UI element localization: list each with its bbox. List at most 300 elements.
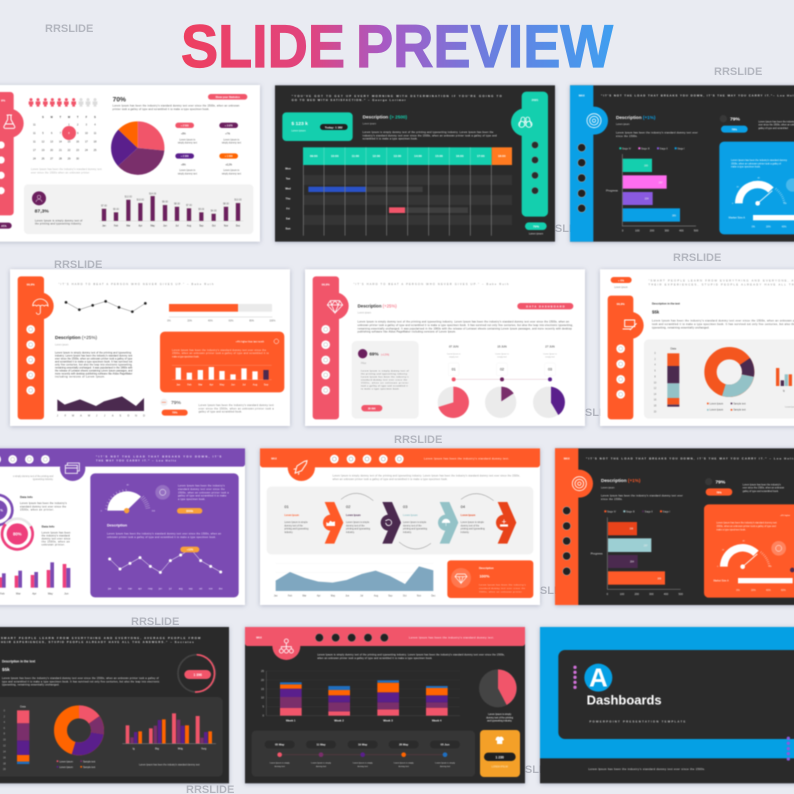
title: SLIDE: [181, 13, 345, 80]
timeline: 07 JUN: [449, 345, 458, 349]
area chart: Aug: [374, 594, 379, 597]
calendar: 4: [94, 124, 96, 127]
description: Lorem Ipsum has been the industry's standard dummy text ever since the 1500s, when an unknown printer took a galley of: [2, 677, 159, 680]
intro text: [317, 653, 505, 660]
intro text: when an unknown printer took a galley of type and scrambled it to make a type specimen book.: [333, 478, 448, 481]
panel: monthly bars: 87,3%: [35, 209, 49, 215]
calendar: F: [86, 116, 88, 119]
card: description 100%: [447, 560, 533, 598]
panel: orange gauge: +4% higher: [780, 514, 790, 517]
body text: Lorem Ipsum is simply dummy text of the printing and typesetting industry. Lorem Ipsum has been the industry's standard dummy text ever since the 1500s, when an: [358, 321, 570, 324]
description: Lorem ipsum: [601, 487, 615, 490]
progress bar: 80%: [249, 320, 254, 322]
calendar: 17: [85, 141, 88, 144]
panel: monthly bars: $10.00: [234, 200, 242, 202]
calendar: 3: [86, 124, 88, 127]
logo A: A: [589, 662, 608, 692]
card: KPI 1 230: 1 230: [495, 755, 504, 759]
area chart: Sep: [388, 595, 393, 597]
panel: orange gauge: [704, 504, 794, 598]
panel: timeline: 05 Jun: [441, 743, 450, 747]
panel: charts: Sample text: [83, 760, 96, 763]
calendar: 12: [42, 141, 45, 144]
calendar: 21: [59, 149, 62, 152]
calendar: 6: [51, 132, 53, 135]
data info 1: 1500s, when an printer.: [20, 509, 54, 512]
watermarks: RRSLIDE: [509, 764, 557, 776]
calendar: 23: [76, 149, 80, 152]
data info 1: Lorem Ipsum has been the industry's: [20, 502, 67, 505]
legend: Stage IV: [607, 510, 616, 513]
panel: purple charts: +12%: [187, 549, 194, 552]
panel: monthly bars: [24, 184, 253, 234]
ring chart 80%: [0, 513, 38, 555]
panel: purple charts: Description: [107, 523, 127, 527]
calendar: 14: [59, 141, 62, 144]
progress bar: 40%: [208, 320, 213, 322]
stacked bar chart: 20: [261, 678, 265, 682]
panel: charts: 16: [654, 400, 657, 402]
stat text: [758, 120, 794, 130]
calendar: T: [77, 116, 79, 119]
step texts: printing and typesetting: [403, 528, 428, 531]
panel: monthly bars: $9.00: [162, 202, 169, 204]
button: data dashboard: DATA DASHBOARD: [526, 304, 565, 308]
pie legend cards: Lorem Ipsum is: [179, 138, 196, 141]
legend: Stage IV: [622, 147, 631, 150]
panel: purple charts: 40: [127, 484, 130, 486]
pie legend cards: Lorem Ipsum is: [223, 169, 240, 172]
panel: orange gauge: make a type specimen book.: [716, 528, 746, 531]
panel: four-step process: [267, 487, 533, 554]
calendar: 1: [68, 124, 70, 127]
top bar: [260, 448, 540, 481]
pie charts: [438, 387, 565, 418]
panel: blue gauge: 40: [758, 177, 761, 179]
intro text: when an unknown printer took a galley of type and scrambled it to make a type specimen book.: [317, 657, 433, 660]
step texts: Lorem Ipsum: [284, 515, 299, 517]
icon: hearts column: [573, 666, 577, 689]
bar chart: progress: 400: [664, 592, 669, 596]
quote: [648, 278, 794, 286]
stacked bar chart: Week 4: [432, 719, 442, 723]
area chart: Feb: [288, 595, 293, 597]
bar chart: progress: 0: [607, 592, 609, 596]
stacked bar chart: [261, 669, 460, 723]
panel: monthly bars: $5.00: [113, 209, 120, 211]
calendar: 24: [33, 158, 36, 161]
bar chart: progress: 500: [694, 229, 699, 233]
panel: stat card: Lorem Ipsum has been the industry's: [361, 376, 408, 379]
KPI card: Lorem ipsum: [291, 129, 306, 132]
panel: purple charts: 1500s, when an unknown printer took a: [178, 491, 229, 494]
pie legend cards: Lorem Ipsum is: [223, 138, 240, 141]
schedule table: Wed: [285, 186, 291, 190]
panel: monthly bars: Oct: [212, 225, 216, 228]
description: industry's standard dummy text ever since the 1500s, when an unknown printer took a galley of type and: [363, 134, 497, 137]
panel: slide 8 process arrows: [260, 448, 540, 605]
bar chart: progress: 199: [629, 529, 634, 531]
ring chart 1: %: [0, 508, 3, 512]
panel: slide 2 dark schedule: [275, 85, 555, 242]
stat text: ever since the 1500s, when an unknown: [743, 487, 785, 490]
panel: charts: 4: [4, 722, 6, 724]
calendar: 2: [77, 124, 79, 127]
top bar: MAX: [271, 458, 277, 461]
panel: orange bars: 1500s, when an unknown printer took a galley of type and scrambled it to: [172, 352, 269, 355]
panel: purple charts: galley of type and scrambled it to make: [178, 495, 227, 498]
area chart: J: [104, 415, 106, 418]
pie legend cards: + 2 500: [181, 125, 189, 127]
panel: purple charts: [90, 473, 239, 597]
card: KPI 1 230: [480, 730, 520, 777]
line chart: [65, 300, 147, 313]
panel: stat card: to make a type specimen book.: [361, 388, 400, 391]
calendar: 16: [76, 141, 80, 144]
data info 1: Data Info: [20, 495, 33, 499]
panel: blue gauge: 20: [737, 187, 740, 189]
panel: orange bars: Lorem Ipsum has been the industry's standard dummy text ever since the: [172, 349, 267, 352]
panel: charts: Lorem Ipsum: [59, 760, 73, 763]
right sidebar: [511, 92, 548, 235]
stacked bar chart: 10: [261, 696, 265, 700]
panel: purple charts: Lorem Ipsum has been the industry's standard dummy text ever since the 1500s, when an: [107, 533, 222, 536]
panel: blue gauge: 0: [732, 203, 734, 205]
calendar: 22: [68, 149, 71, 152]
description: Lorem Ipsum is simply dummy text of the printing and typesetting: [55, 352, 132, 355]
area chart: Jul: [360, 595, 364, 597]
schedule table: Tue: [286, 176, 291, 180]
panel: stat card: 1500s, when an unknown printer: [361, 382, 409, 385]
bar chart: progress: 204: [630, 562, 635, 564]
stat 79%: [160, 399, 188, 416]
step texts: Lorem Ipsum is simple: [403, 521, 427, 524]
title: PREVIEW: [356, 13, 613, 80]
pie chart: dummy text of the printing: [486, 716, 514, 719]
panel: monthly bars: Jun: [163, 226, 168, 228]
watermarks: RRSLIDE: [524, 585, 572, 597]
panel: charts: 2: [654, 359, 656, 361]
pie legend cards: [175, 123, 241, 175]
area chart: [274, 563, 436, 597]
panel: charts: [644, 339, 794, 419]
quote: "IT'S NOT THE LOAD THAT BREAKS YOU DOWN, IT'S THE WAY YOU CARRY IT." – Lou Holtz: [586, 457, 794, 461]
panel: charts: Sample text: [733, 402, 746, 405]
description: the release of Letraset sheets containing Lorem Ipsum passages, and: [55, 370, 133, 373]
stacked bar chart: Week 1: [286, 719, 296, 723]
description: since the 1500s.: [616, 135, 638, 138]
heading 70%: 70%: [113, 97, 126, 104]
schedule table: 09:00: [310, 154, 318, 158]
step texts: industry.: [346, 531, 355, 534]
area chart: Jun: [345, 595, 350, 597]
panel: purple charts: dec: [219, 588, 223, 590]
quote: "IT'S HARD TO BEAT A PERSON WHO NEVER GIVES UP." – Babe Ruth: [353, 282, 509, 286]
step texts: industry.: [403, 531, 412, 534]
area chart: J: [96, 415, 98, 418]
body text: publishing software like Aldus PageMaker including versions of Lorem Ipsum.: [358, 331, 456, 334]
step texts: Lorem Ipsum: [461, 515, 475, 517]
description: [2, 660, 160, 687]
data info 2: the industry's standard: [42, 534, 70, 537]
schedule table: 16:00: [456, 154, 464, 158]
step texts: printing and typesetting: [284, 528, 309, 531]
calendar caption: [31, 168, 102, 174]
data info 2: unknown printer.: [42, 543, 65, 546]
panel: purple charts: oct: [199, 587, 203, 590]
heading: Dashboards: [587, 692, 662, 707]
bar chart: progress: 389: [672, 215, 677, 217]
description: including versions of Lorem Ipsum.: [55, 376, 105, 379]
panel: purple charts: Lorem Ipsum has been the industry's: [178, 485, 225, 488]
intro text: printer took a galley of type and scrambled it to make a type specimen book.: [113, 108, 210, 111]
panel: stat card: 69%: [369, 352, 380, 357]
description: Description (+1%): [601, 478, 641, 483]
data info 2: [42, 524, 71, 546]
step texts: dummy text of the: [284, 524, 304, 527]
quote: [1, 636, 201, 644]
panel: purple charts: a type specimen book.: [178, 498, 206, 501]
panel: timeline: Lorem Ipsum is simply: [311, 762, 331, 765]
calendar: 9: [77, 132, 79, 135]
bar chart: progress: [591, 517, 683, 596]
stacked bar chart: Week 3: [383, 719, 393, 723]
panel: charts: 12: [3, 745, 6, 747]
pie legend cards: simply dummy text: [178, 142, 197, 145]
stat text: galley of type and scrambled book.: [199, 411, 242, 414]
button: data dashboard: [517, 303, 573, 309]
panel: orange bars: make a type specimen book.: [172, 355, 200, 358]
bar chart: [0, 562, 70, 596]
panel: blue gauge: [719, 142, 794, 234]
card: description 100%: Description: [479, 566, 494, 570]
sidebar: 9%: [1, 98, 6, 102]
stacked bar chart: Week 2: [334, 719, 344, 723]
description: scrambled it to make a type specimen book.: [363, 138, 418, 141]
panel: monthly bars: Lorem Ipsum is simply dummy text of: [35, 219, 83, 222]
panel: purple charts: apr: [138, 587, 142, 590]
panel: slide 4 orange overview: [10, 269, 290, 426]
pie chart: [111, 121, 164, 175]
description: industry. Lorem Ipsum has been the industry's standard dummy text: [55, 355, 133, 358]
panel: monthly bars: $7.00: [186, 205, 193, 207]
step texts: Lorem Ipsum is simple: [284, 521, 308, 524]
panel: orange bars: [160, 332, 284, 392]
panel: slide 7 purple dashboard: [0, 448, 245, 605]
footer text: Lorem Ipsum has been the industry's standard dummy text ever since the 1500s.: [588, 768, 705, 771]
panel: charts: Lorem Ipsum: [59, 766, 73, 769]
description: Description (+25%): [55, 335, 98, 340]
stat text: [743, 483, 785, 493]
timeline: 27 JUN: [545, 345, 555, 349]
description: since the 1500s.: [601, 498, 623, 501]
panel: charts: Lorem Ipsum has been the industry's standard dummy text: [139, 764, 200, 767]
sidebar: 99,9%: [617, 302, 625, 306]
pie legend cards: +0,2%: [225, 164, 232, 166]
step texts: 03: [403, 504, 408, 509]
calendar: 11: [33, 141, 36, 144]
description: type and scrambled it to make a type specimen book. It has survived not only five centuries, but also the leap into electronic: [2, 680, 160, 683]
arrows: curved connectors: [341, 493, 494, 549]
title: [181, 13, 613, 80]
panel: stat card: the printing and typesetting industry.: [361, 373, 408, 376]
progress bar: 100%: [269, 320, 275, 322]
calendar caption: Lorem Ipsum has been the industry's standard dummy text: [31, 168, 102, 171]
area chart: O: [127, 415, 129, 418]
step texts: industry.: [284, 531, 293, 534]
card: KPI 1 230: LOREM IPSUM: [492, 766, 508, 768]
calendar: 30: [76, 158, 80, 161]
calendar: 17: [33, 149, 36, 152]
stat text: galley of type and scrambled: [758, 127, 789, 130]
timeline: simply text: [545, 355, 555, 358]
badge: + 0%: [618, 278, 625, 282]
bar chart: May: [48, 592, 54, 596]
timeline: simply text: [497, 355, 507, 358]
panel: orange gauge: Market Size A: [713, 580, 729, 583]
area chart: Mar: [302, 594, 307, 597]
panel: blue gauge: 20%: [766, 227, 771, 229]
description: Description in the text: [652, 302, 680, 306]
step texts: 01: [284, 504, 290, 509]
panel: purple charts: jun: [158, 588, 163, 590]
stat 79%: [720, 115, 748, 133]
intro text: [333, 475, 520, 481]
calendar: W: [68, 116, 71, 119]
sidebar: [313, 276, 349, 419]
panel: charts: Ig: [133, 748, 135, 750]
panel: monthly bars: the printing and typesetting industry.: [35, 223, 82, 226]
calendar: 13: [50, 141, 54, 144]
legend: Stage II: [660, 147, 668, 150]
description: Description (+1%): [616, 115, 656, 120]
schedule table: 15:00: [435, 154, 443, 158]
button: show statistics: Show your Statistics: [215, 96, 240, 99]
right sidebar: 79%: [533, 224, 539, 228]
panel: timeline: Lorem Ipsum is simply: [435, 762, 455, 765]
panel: orange bars: Jun: [231, 383, 236, 386]
calendar: 8: [68, 132, 70, 135]
stat 79%: [705, 478, 732, 496]
panel: stat card: standard dummy text ever since the: [361, 379, 408, 382]
panel: purple charts: standard dummy text ever since the: [178, 488, 225, 491]
progress bar: 20%: [187, 320, 192, 322]
panel: charts: 4: [654, 365, 656, 367]
quote: GO TO BED WITH SATISFACTION." – George Lorimer: [292, 98, 407, 102]
legend: Stage III: [641, 147, 650, 150]
description: Lorem Ipsum is simply dummy text of the printing and typesetting industry. Lorem Ipsum has been the: [363, 131, 494, 134]
panel: monthly bars: $8.00: [223, 203, 230, 205]
stacked bar chart: 5: [263, 705, 265, 709]
stacked bar chart: 25: [261, 669, 265, 673]
panel: monthly bars: $4.00: [211, 211, 217, 213]
panel: charts: 14: [654, 394, 657, 396]
sidebar: [570, 85, 608, 242]
panel: charts: Ig: [783, 391, 785, 393]
panel: charts: 10: [654, 382, 657, 384]
step texts: 04: [461, 504, 466, 509]
panel: purple charts: 100: [152, 510, 156, 512]
panel: timeline: Lorem Ipsum is simply: [353, 762, 373, 765]
area chart: Nov: [417, 595, 422, 597]
ring chart 80%: 80%: [13, 532, 22, 537]
panel: monthly bars: Apr: [139, 225, 142, 228]
top bar: THE WAY YOU CARRY IT." – Lou Holtz: [96, 459, 177, 463]
area chart: M: [88, 415, 90, 418]
panel: orange gauge: 40: [743, 540, 746, 542]
panel: timeline: 05 May: [275, 743, 285, 747]
description: $5k: [2, 667, 10, 672]
top bar: Lorem Ipsum has been the industry's standard dummy text.: [409, 636, 494, 639]
panel: purple charts: may: [148, 588, 153, 590]
area chart: S: [119, 415, 121, 418]
description: Lorem Ipsum has been the industry's standard dummy text ever: [616, 132, 698, 135]
panel: purple charts: jul: [168, 588, 172, 590]
panel: charts: Sample text: [733, 409, 746, 412]
legend: Stage III: [626, 510, 635, 513]
panel: orange gauge: 40%: [766, 590, 771, 592]
panel: blue gauge: Market Size A: [729, 216, 745, 220]
area chart: Apr: [317, 594, 321, 597]
panel: blue gauge: 1500s, when an unknown printer took a galley of: [731, 162, 781, 165]
calendar: S: [94, 116, 96, 119]
calendar: 11: [33, 132, 36, 135]
panel: purple charts: sep: [189, 588, 193, 590]
pie legend cards: simply dummy text: [222, 172, 241, 175]
panel: timeline: dummy text: [399, 765, 409, 768]
people icon row: [29, 98, 97, 107]
panel: charts: 8: [654, 376, 656, 378]
calendar: 25: [94, 149, 97, 152]
description: Lorem ipsum: [616, 123, 630, 126]
watermarks: RRSLIDE: [539, 223, 587, 235]
calendar: 11: [33, 124, 36, 127]
sidebar: 99,9%: [27, 283, 35, 287]
card: description 100%: standard dummy text ever since the: [479, 587, 526, 590]
description: and scrambled it to make a type specimen book. It has survived not: [55, 361, 133, 364]
step texts: industry.: [461, 531, 470, 534]
panel: orange bars: Apr: [209, 383, 213, 386]
area chart: Jan: [274, 595, 278, 597]
intro text: Lorem Ipsum is simply dummy text of the printing and typesetting industry. Lorem Ipsum has been the industry's standard dummy text ever since the 1500s,: [317, 653, 505, 656]
pie chart: [479, 669, 517, 723]
schedule table: 10:00: [331, 154, 339, 158]
intro text: [113, 105, 240, 111]
panel: stat card: 38 896: [368, 407, 376, 410]
panel: charts: [0, 697, 223, 777]
bar chart: progress: 100: [635, 229, 640, 233]
step texts: printing and typesetting: [346, 528, 371, 531]
description: Lorem ipsum: [358, 312, 371, 315]
quote: "YOU'VE GOT TO GET UP EVERY MORNING WITH DETERMINATION IF YOU'RE GOING TO: [292, 94, 502, 98]
panel: slide 9 orange progress: [555, 448, 794, 605]
panel: slide 6 donut dashboard: [600, 269, 794, 426]
bar chart: progress: Progress: [591, 552, 603, 556]
watermarks: RRSLIDE: [394, 434, 442, 446]
panel: monthly bars: Nov: [224, 226, 229, 228]
panel: charts: 2: [4, 716, 6, 718]
sidebar: MAX: [564, 456, 570, 460]
panel: charts: Big: [155, 748, 159, 750]
panel: slide 10 dark donut dashboard: [0, 627, 229, 783]
panel: orange bars: Feb: [187, 383, 192, 386]
panel: blue gauge: 100: [783, 203, 788, 205]
panel: timeline: [252, 731, 475, 777]
legend: [604, 510, 670, 513]
panel: slide 5 data dashboard: [305, 269, 585, 426]
quote: HEIR EXPERIENCES, STUPID PEOPLE ALREADY HAVE ALL THE ANSWERS." – Socrates: [1, 640, 194, 644]
step texts: dummy text of the: [403, 524, 422, 527]
